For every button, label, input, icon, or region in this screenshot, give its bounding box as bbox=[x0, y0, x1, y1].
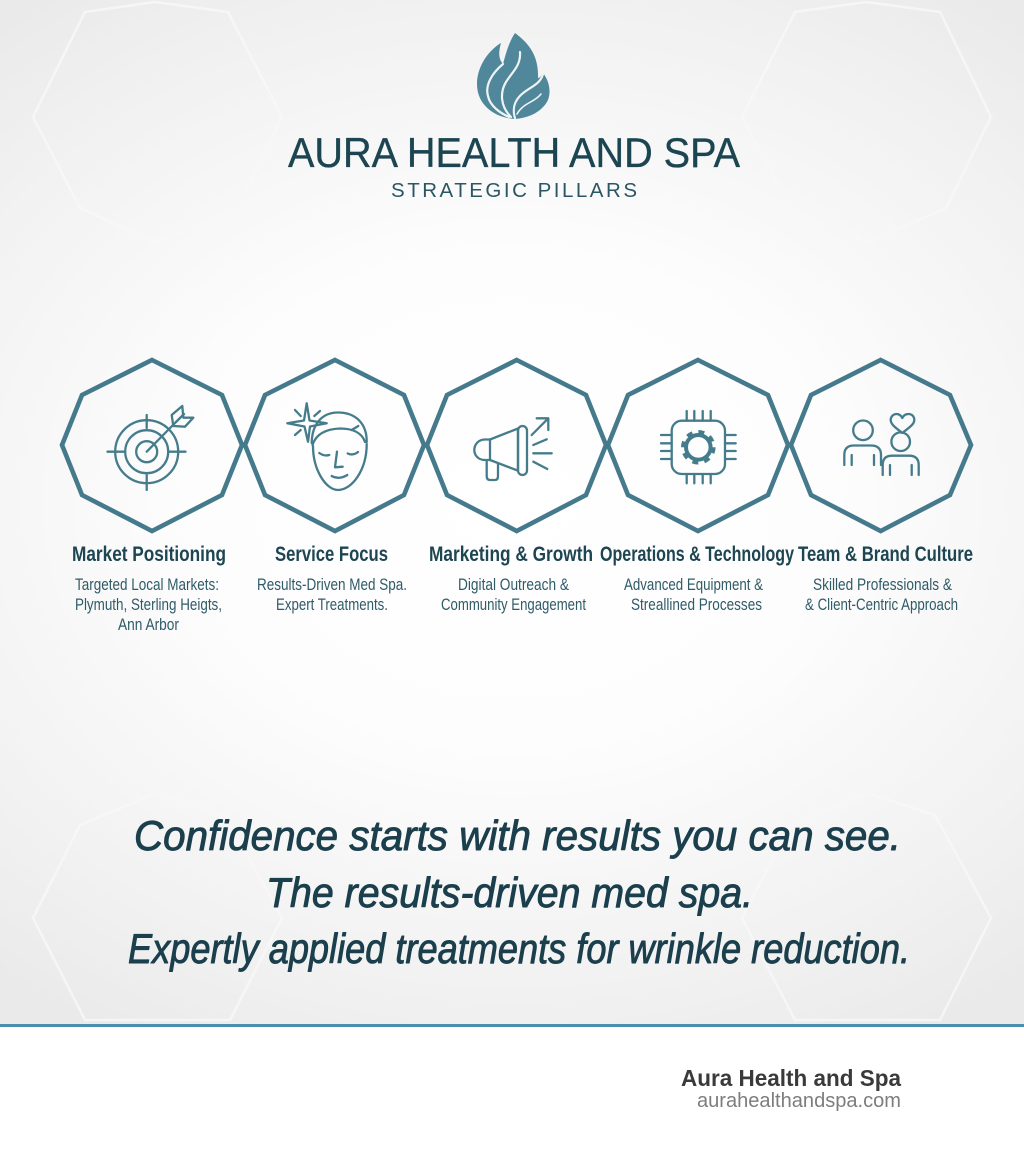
footer band bbox=[0, 1024, 1024, 1154]
description bbox=[257, 575, 407, 614]
slogan: Expertly applied treatments for wrinkle reduction. bbox=[128, 925, 910, 972]
panel: marketing and growth bbox=[427, 360, 606, 614]
description: Digital Outreach & bbox=[458, 575, 570, 594]
description bbox=[441, 575, 586, 614]
slogan bbox=[128, 812, 910, 972]
description: & Client-Centric Approach bbox=[805, 595, 958, 614]
footer brand name: Aura Health and Spa bbox=[681, 1065, 901, 1091]
description: Ann Arbor bbox=[118, 615, 179, 634]
panel: service focus bbox=[245, 360, 424, 614]
octagon frame bbox=[245, 360, 424, 531]
description bbox=[75, 575, 222, 634]
footer website: aurahealthandspa.com bbox=[697, 1090, 901, 1112]
heading: Marketing & Growth bbox=[429, 543, 593, 566]
heading: Team & Brand Culture bbox=[798, 543, 973, 566]
panel: operations and technology bbox=[600, 360, 794, 614]
icon: chip with gear bbox=[661, 411, 736, 483]
description bbox=[624, 575, 764, 614]
icon: face with sparkle bbox=[287, 403, 367, 490]
octagon frame bbox=[608, 360, 788, 531]
description: Streallined Processes bbox=[631, 595, 762, 614]
description: Expert Treatments. bbox=[276, 595, 388, 614]
icon: megaphone bbox=[474, 418, 552, 480]
description: Targeted Local Markets: bbox=[75, 575, 219, 594]
panel: team and brand culture bbox=[791, 360, 973, 614]
description: Plymuth, Sterling Heigts, bbox=[75, 595, 222, 614]
heading: Market Positioning bbox=[72, 543, 226, 566]
octagon frame bbox=[62, 360, 242, 531]
icon: target with arrow bbox=[108, 406, 193, 490]
icon: two people with heart bbox=[844, 414, 919, 475]
panel: market positioning bbox=[62, 360, 242, 634]
subtitle: STRATEGIC PILLARS bbox=[391, 179, 637, 202]
description: Skilled Professionals & bbox=[813, 575, 953, 594]
heading: Service Focus bbox=[275, 543, 388, 566]
icon: flame and leaf logo bbox=[477, 33, 550, 119]
octagon frame bbox=[427, 360, 606, 531]
title: AURA HEALTH AND SPA bbox=[288, 129, 740, 176]
heading: Operations & Technology bbox=[600, 543, 794, 566]
description: Advanced Equipment & bbox=[624, 575, 764, 594]
description: Community Engagement bbox=[441, 595, 586, 614]
description: Results-Driven Med Spa. bbox=[257, 575, 407, 594]
description bbox=[805, 575, 958, 614]
slogan: Confidence starts with results you can see. bbox=[134, 812, 901, 859]
slogan: The results-driven med spa. bbox=[266, 869, 753, 916]
octagon frame bbox=[791, 360, 971, 531]
